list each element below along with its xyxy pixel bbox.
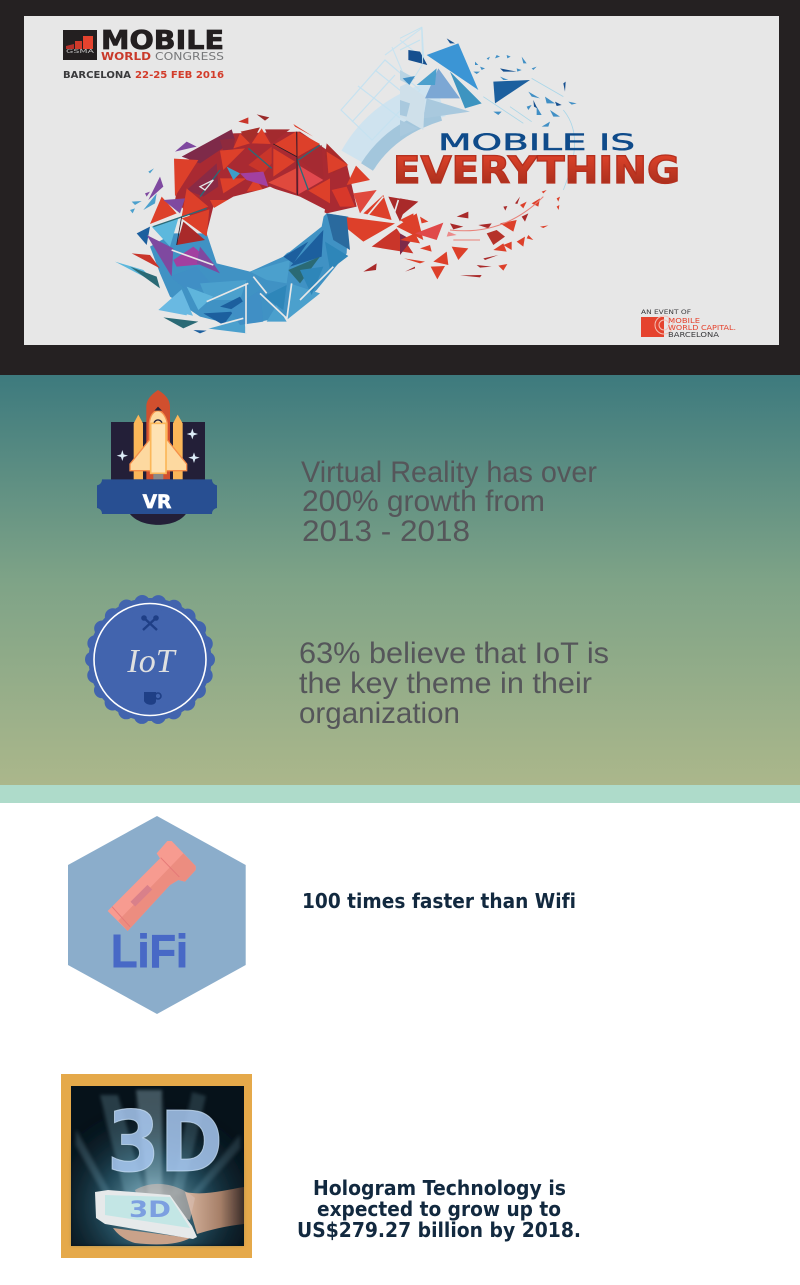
dark lines: [153, 145, 320, 227]
blue shards: [115, 168, 377, 333]
text: Hologram forecast: expected to grow up to: [317, 1197, 561, 1221]
icon: LiFi hexagon: [68, 816, 246, 1014]
light blue ribbon and wireframes: [341, 28, 440, 167]
text: IoT key theme: [299, 637, 609, 730]
hole of the ring: [207, 187, 325, 271]
lower right red shards: [400, 190, 560, 279]
logo: Mobile World Capital Barcelona: BARCELONA: [668, 331, 719, 339]
icon: LiFi hexagon: LiFi: [111, 925, 188, 977]
pale green divider strip: [0, 785, 800, 803]
logo: Mobile World Capital Barcelona: MOBILE: [668, 317, 700, 325]
text: Hologram forecast: Hologram Technology is: [313, 1176, 566, 1200]
icon: IoT scalloped badge: [88, 598, 212, 721]
text: Virtual Reality growth: [301, 456, 597, 548]
flashlight: [108, 841, 196, 931]
logo: GSMA Mobile World Congress: CONGRESS: [155, 51, 224, 63]
logo: GSMA Mobile World Congress: GSMA: [66, 49, 95, 55]
banner panel: Mobile World Congress: [24, 16, 779, 345]
red shards: [150, 114, 423, 253]
upper right shards: [400, 27, 577, 190]
headline: Mobile is Everything: [393, 131, 680, 192]
logo: Mobile World Capital Barcelona: AN EVENT OF: [641, 310, 691, 316]
logo: GSMA Mobile World Congress: WORLD: [101, 51, 151, 63]
logo: GSMA Mobile World Congress: MOBILE: [101, 26, 224, 56]
gradient section background: [0, 375, 800, 785]
icon: IoT scalloped badge: IoT: [126, 643, 177, 680]
text: Virtual Reality growth: 2013 - 2018: [302, 515, 470, 548]
logo: GSMA Mobile World Congress: 22-25 FEB 2016: [135, 70, 224, 81]
phone: [95, 1190, 197, 1239]
text: LiFi speed: 100 times faster than Wifi: [302, 889, 576, 913]
hand: [113, 1184, 244, 1244]
logo: GSMA Mobile World Congress: BARCELONA: [63, 70, 131, 81]
text: Hologram forecast: [297, 1176, 581, 1242]
headline: Mobile is Everything: MOBILE IS: [438, 131, 635, 156]
icon: VR rocket badge: [97, 390, 217, 525]
icon: 3D hologram image: 3D: [107, 1093, 223, 1191]
text: IoT key theme: the key theme in their: [299, 667, 592, 700]
logo: GSMA Mobile World Congress: [63, 26, 224, 81]
logo: Mobile World Capital Barcelona: WORLD CAPITAL.: [668, 324, 736, 332]
ring of shards: base shape: [115, 114, 423, 333]
text: Hologram forecast: US$279.27 billion by 2018.: [297, 1218, 581, 1242]
text: IoT key theme: 63% believe that IoT is: [299, 637, 609, 670]
text: IoT key theme: organization: [299, 697, 460, 730]
icon: 3D hologram image: 3D: [129, 1198, 171, 1223]
text: Virtual Reality growth: 200% growth from: [302, 485, 545, 518]
light rays: [71, 1086, 244, 1246]
icon: 3D hologram image: [61, 1074, 252, 1258]
text: Virtual Reality growth: Virtual Reality has over: [301, 456, 597, 489]
icon: VR rocket badge: VR: [143, 492, 171, 513]
header band: [0, 0, 800, 375]
logo: Mobile World Capital Barcelona: [641, 310, 736, 339]
headline: Mobile is Everything: EVERYTHING: [393, 149, 680, 192]
background-coloured gaps between shards: [172, 197, 398, 333]
